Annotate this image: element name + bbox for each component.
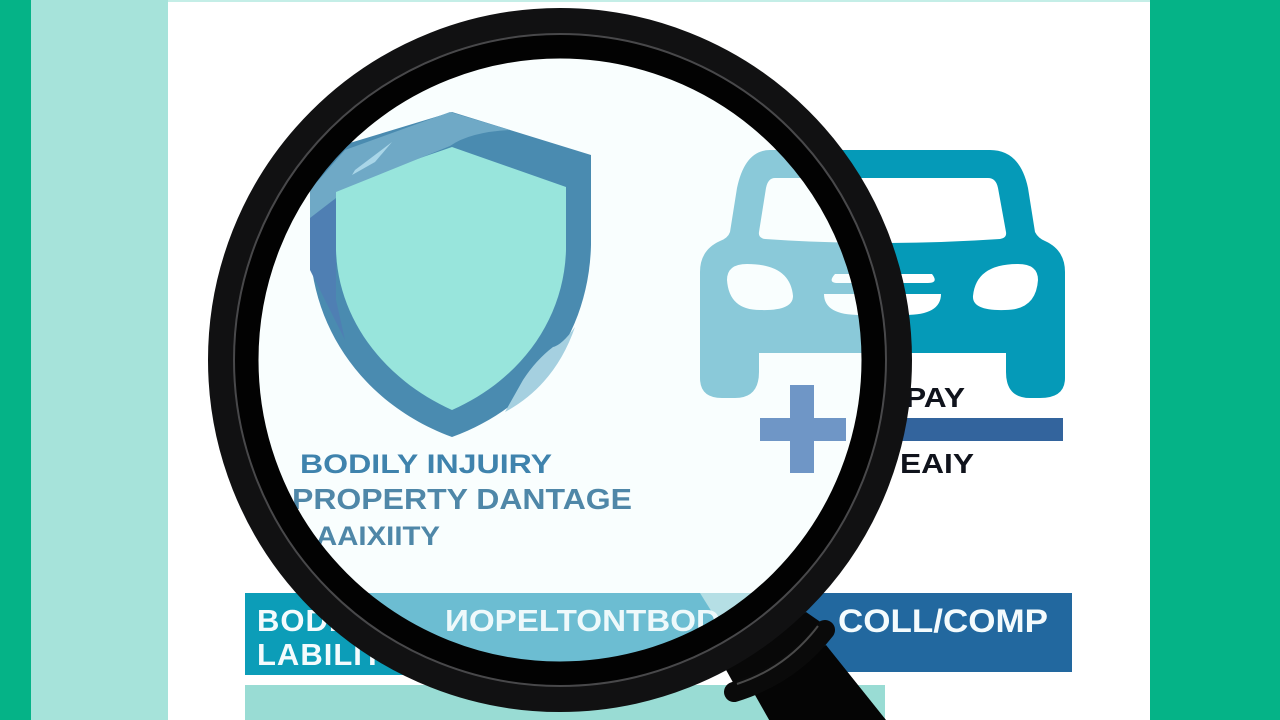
inner rim band	[246, 46, 874, 674]
heading: property damage: PROPERTY DANTAGE	[292, 484, 632, 516]
top edge strip	[168, 0, 1150, 2]
banner: bodily injury liability	[245, 593, 545, 675]
icon: plus	[760, 385, 846, 473]
banner: collision and comprehensive	[760, 593, 1072, 672]
lower pale panel	[245, 685, 885, 720]
handle neck	[725, 612, 832, 695]
icon: car, magnified	[700, 150, 862, 398]
heading: bodily injury: BODILY INJUIRY	[300, 449, 552, 479]
collar highlight	[737, 626, 818, 684]
magnified banner: LABILI	[257, 637, 357, 672]
handle collar	[734, 630, 825, 692]
magnified banner	[368, 593, 751, 662]
icon: car, outside lens colour	[842, 150, 1065, 398]
banner: bodily injury liability: BODILY	[257, 603, 377, 638]
label: PAY: PAY	[905, 382, 965, 413]
magnifier: handle and rim	[221, 21, 899, 720]
banner: collision and comprehensive: COLL/COMP	[838, 603, 1048, 639]
lens glass	[250, 50, 870, 670]
magnified banner: BOD	[257, 603, 329, 638]
magnified banner: ИOPELTONTBOD	[445, 603, 720, 638]
magnifier lens view	[294, 112, 862, 662]
document page	[168, 0, 1150, 720]
heading: liability: AAIXIITY	[316, 521, 440, 551]
handle shaft	[755, 645, 890, 720]
rim highlight	[234, 34, 886, 686]
label: EAIY: EAIY	[900, 448, 974, 479]
blue divider bar	[860, 418, 1063, 441]
background: pale teal column	[31, 0, 168, 720]
icon: shield	[310, 112, 591, 437]
outer rim band	[221, 21, 899, 699]
banner: bodily injury liability: LABILITY	[257, 637, 404, 672]
